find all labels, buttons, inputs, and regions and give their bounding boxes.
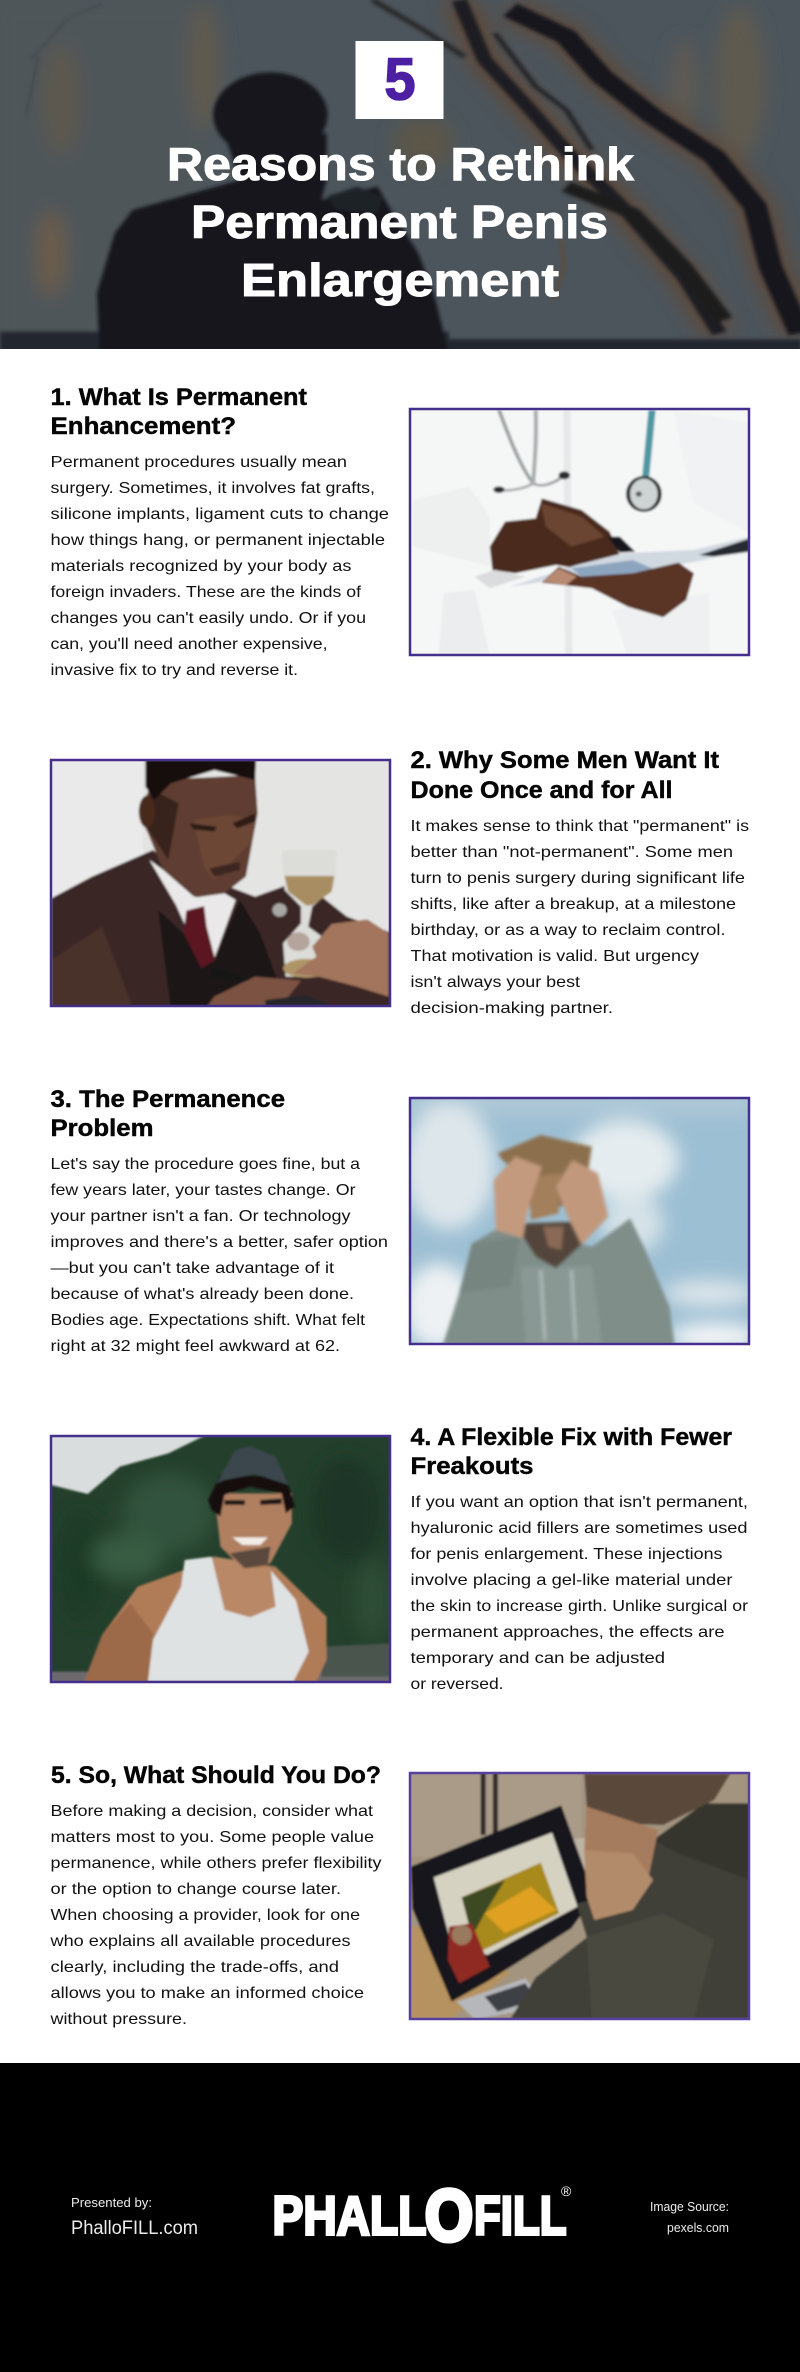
panel: section 1 <box>50 384 755 679</box>
panel: section 2 <box>46 747 749 1017</box>
number badge: 5: 5 <box>384 46 416 112</box>
heading: so what should you do: 5. So, What Should You Do? <box>51 1762 381 1789</box>
body text section 5: permanence, while others prefer flexibility <box>50 1855 382 1872</box>
photo: smiling man in white tank top and cap <box>48 1433 395 1685</box>
body text section 5: without pressure. <box>49 2011 187 2028</box>
body text section 4: If you want an option that isn't permanent, <box>410 1494 748 1511</box>
body text section 3: Let's say the procedure goes fine, but a <box>50 1156 360 1173</box>
body text section 3: right at 32 might feel awkward at 62. <box>50 1338 340 1355</box>
heading: what is permanent enhancement <box>50 384 307 440</box>
body text section 1: how things hang, or permanent injectable <box>50 532 385 549</box>
body text section 5: When choosing a provider, look for one <box>50 1907 360 1924</box>
image source <box>650 2200 729 2235</box>
heading: the permanence problem: 3. The Permanence <box>50 1086 285 1113</box>
body text section 4: involve placing a gel-like material under <box>410 1572 733 1589</box>
heading: a flexible fix: 4. A Flexible Fix with Fewer <box>410 1424 732 1451</box>
image source: pexels.com <box>667 2221 729 2235</box>
title: Permanent Penis <box>191 196 608 248</box>
heading: a flexible fix: Freakouts <box>410 1453 534 1480</box>
logo: PhalloFILL: FILL <box>474 2184 566 2246</box>
heading: why some men want it: Done Once and for All <box>410 777 672 804</box>
body text section 2: better than "not-permanent". Some men <box>410 844 733 861</box>
body text section 3: because of what's already been done. <box>50 1286 354 1303</box>
panel: section 5 <box>49 1762 755 2028</box>
body text section 2 <box>410 818 749 1017</box>
body text section 3: Bodies age. Expectations shift. What felt <box>50 1312 366 1329</box>
body text section 5 <box>49 1803 381 2028</box>
body text section 1 <box>50 454 389 679</box>
presented by: Presented by: <box>71 2195 152 2210</box>
body text section 1: surgery. Sometimes, it involves fat grafts, <box>50 480 375 497</box>
heading: a flexible fix <box>410 1424 732 1480</box>
body text section 1: foreign invaders. These are the kinds of <box>50 584 362 601</box>
body text section 2: birthday, or as a way to reclaim control. <box>410 922 726 939</box>
body text section 2: That motivation is valid. But urgency <box>410 948 699 965</box>
body text section 1: invasive fix to try and reverse it. <box>50 662 298 679</box>
presented by: PhalloFILL.com <box>71 2218 198 2239</box>
body text section 4 <box>410 1494 749 1693</box>
number badge: 5 <box>356 41 444 119</box>
title: Enlargement <box>241 254 559 306</box>
body text section 1: materials recognized by your body as <box>50 558 352 575</box>
logo: PhalloFILL: O <box>425 2176 473 2256</box>
heading: the permanence problem: Problem <box>50 1115 154 1142</box>
logo: PhalloFILL <box>272 2176 572 2256</box>
body text section 4: for penis enlargement. These injections <box>410 1546 722 1563</box>
title: Reasons to Rethink <box>167 138 634 190</box>
body text section 1: changes you can't easily undo. Or if you <box>50 610 366 627</box>
photo: man looking at laptop <box>408 1770 755 2020</box>
footer <box>0 2063 800 2372</box>
hero banner <box>0 0 800 353</box>
body text section 3 <box>50 1156 388 1355</box>
body text section 3: —but you can't take advantage of it <box>50 1260 335 1277</box>
body text section 5: Before making a decision, consider what <box>50 1803 374 1820</box>
heading: why some men want it: 2. Why Some Men Want It <box>410 747 719 774</box>
body text section 4: temporary and can be adjusted <box>410 1650 665 1667</box>
body text section 5: allows you to make an informed choice <box>50 1985 364 2002</box>
photo: doctor writing on clipboard <box>408 407 755 657</box>
body text section 4: the skin to increase girth. Unlike surgical or <box>410 1598 749 1615</box>
body text section 5: or the option to change course later. <box>50 1881 341 1898</box>
title <box>167 138 634 306</box>
body text section 4: hyaluronic acid fillers are sometimes used <box>410 1520 748 1537</box>
body text section 5: clearly, including the trade-offs, and <box>50 1959 339 1976</box>
body text section 2: shifts, like after a breakup, at a milestone <box>410 896 736 913</box>
body text section 4: permanent approaches, the effects are <box>410 1624 725 1641</box>
heading: why some men want it <box>410 747 719 804</box>
logo: PhalloFILL: PHALL <box>272 2184 426 2246</box>
hero photo: silhouetted man against marble wall <box>0 0 800 353</box>
body text section 3: your partner isn't a fan. Or technology <box>50 1208 350 1225</box>
panel: section 4 <box>48 1424 749 1693</box>
body text section 2: isn't always your best <box>410 974 581 991</box>
heading: the permanence problem <box>50 1086 285 1142</box>
body text section 1: Permanent procedures usually mean <box>50 454 347 471</box>
presented by <box>71 2195 198 2239</box>
heading: what is permanent enhancement: Enhancement? <box>50 413 236 440</box>
body text section 2: decision-making partner. <box>410 1000 613 1017</box>
body text section 2: turn to penis surgery during significant life <box>410 870 745 887</box>
image source: Image Source: <box>650 2200 729 2214</box>
body text section 3: few years later, your tastes change. Or <box>50 1182 356 1199</box>
body text section 1: can, you'll need another expensive, <box>50 636 328 653</box>
logo: PhalloFILL: ® <box>561 2183 572 2199</box>
body text section 5: matters most to you. Some people value <box>50 1829 374 1846</box>
body text section 5: who explains all available procedures <box>49 1933 350 1950</box>
body text section 1: silicone implants, ligament cuts to change <box>50 506 389 523</box>
photo: stressed man holding head against sky <box>403 1095 760 1350</box>
body text section 4: or reversed. <box>410 1676 504 1693</box>
body text section 3: improves and there's a better, safer option <box>50 1234 388 1251</box>
panel: section 3 <box>50 1086 760 1355</box>
body text section 2: It makes sense to think that "permanent" is <box>410 818 749 835</box>
photo: man holding hourglass <box>46 757 398 1010</box>
heading: what is permanent enhancement: 1. What Is Permanent <box>50 384 307 411</box>
